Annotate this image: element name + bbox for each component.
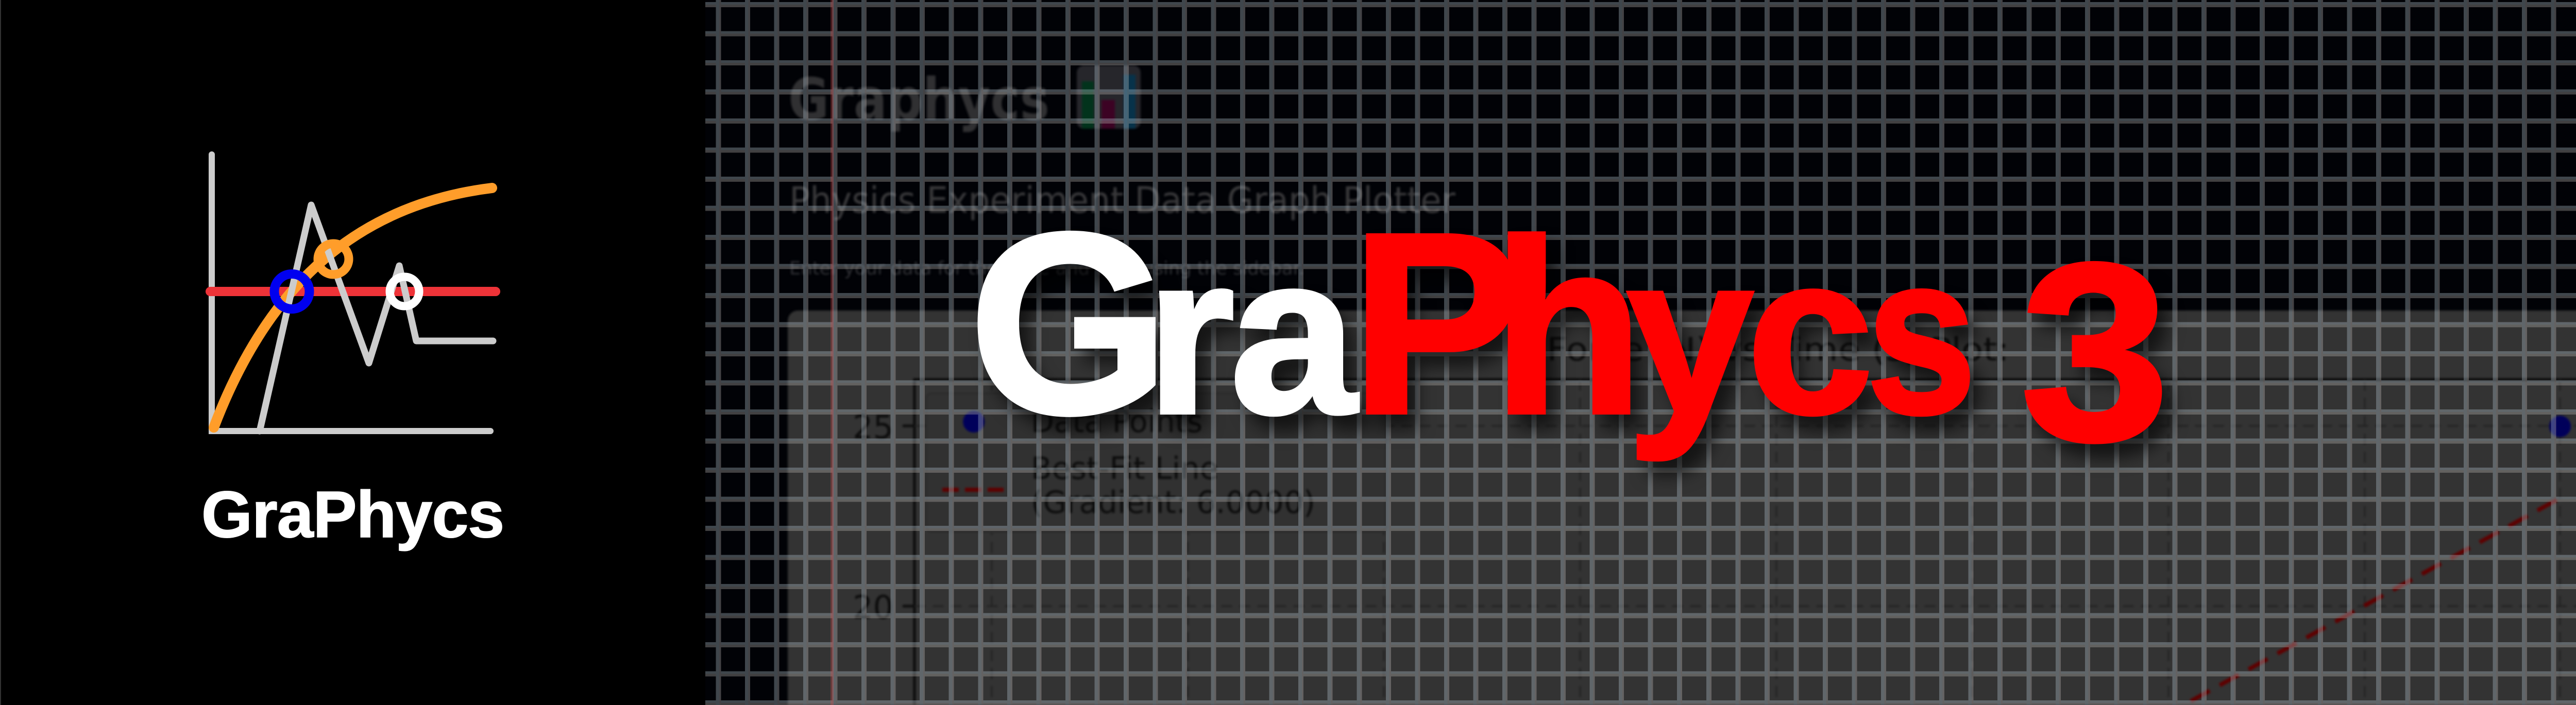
red margin line — [831, 0, 834, 705]
y axis tick 25: 25 — [853, 408, 893, 446]
main title: G — [969, 179, 1170, 467]
main title: s — [1867, 208, 1976, 461]
icon: bar chart — [1077, 65, 1141, 129]
panel: logo — [0, 0, 504, 705]
app instruction text: Enter your data for the force and time using the sidebar. — [789, 258, 1304, 279]
best-fit line — [2177, 500, 2556, 705]
data point marker — [2549, 416, 2571, 437]
main title: h — [1493, 188, 1643, 465]
logo wordmark: GraPhycs — [201, 478, 504, 551]
y axis tick 20: 20 — [853, 589, 893, 626]
plot card — [788, 311, 2576, 705]
main title: yc — [1627, 208, 1873, 462]
plot gridlines — [914, 380, 2576, 705]
plot title: Force (N) vs Time (s) Plot: — [1547, 331, 2009, 368]
plot legend: Best-Fit Line — [1031, 451, 1218, 487]
gray zigzag line — [260, 205, 493, 431]
main title: ra — [1146, 208, 1358, 461]
blue circle — [274, 274, 309, 309]
app subtitle: Physics Experiment Data Graph Plotter — [789, 179, 1455, 221]
plot legend: Data Points — [1031, 404, 1202, 440]
white circle — [389, 277, 419, 306]
y axis tick 25 — [853, 408, 914, 446]
orange circle — [318, 244, 349, 274]
plot axes — [914, 380, 2576, 705]
plot legend — [926, 393, 1386, 532]
plot legend: (Gradient: 6.0000) — [1031, 485, 1315, 521]
orange curve — [214, 188, 492, 427]
graph axes — [212, 154, 490, 431]
main title: 3 — [2021, 211, 2170, 493]
red horizontal line — [210, 287, 496, 296]
icon: graph logo — [210, 154, 496, 431]
background grid — [705, 0, 2576, 705]
main title: P — [1351, 179, 1523, 467]
app heading: Graphycs: Graphycs — [788, 66, 1049, 133]
y axis tick 20 — [853, 589, 914, 626]
